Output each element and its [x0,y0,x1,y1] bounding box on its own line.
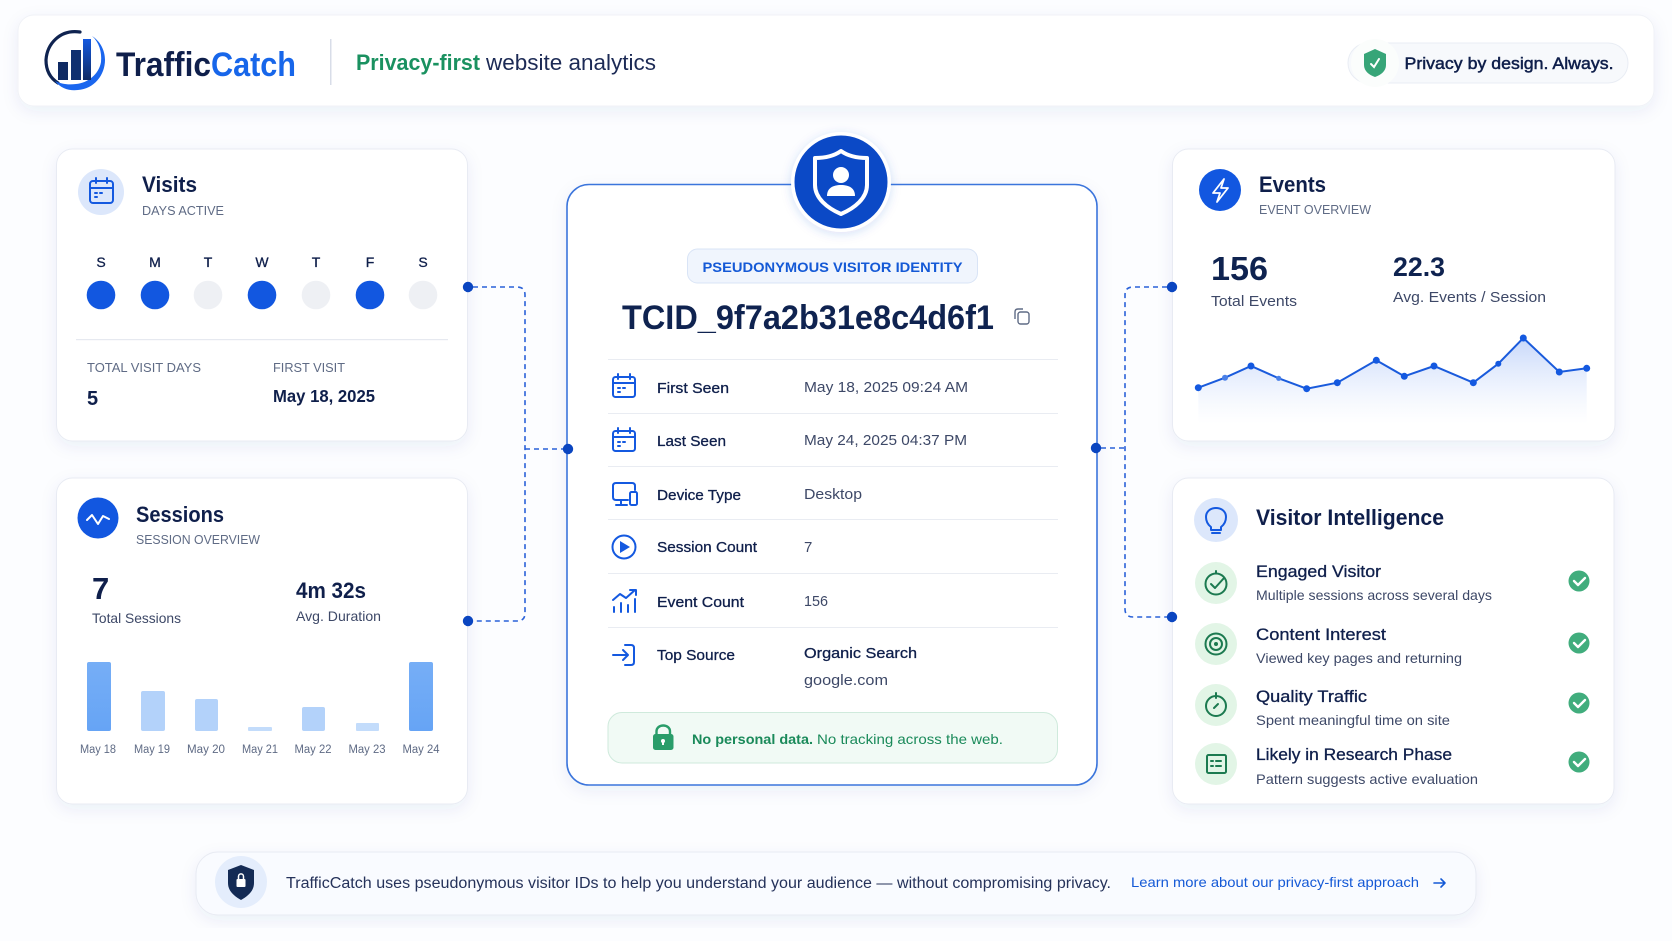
line chart: events [1195,334,1590,424]
sessions heading: Sessions [136,502,224,527]
row: top source: Top Source [657,647,735,664]
bar chart: sessions by day: May 18 [80,744,116,756]
days active row: W [255,254,269,270]
total sessions [92,571,181,626]
connector: left [463,282,573,626]
footer banner: TrafficCatch uses pseudonymous visitor IDs to help you understand your audience — without compromising privacy. [286,875,1111,892]
row: event count: 156 [804,593,828,610]
tagline [356,50,656,75]
row: first seen [613,374,968,397]
icon: arrow [1434,879,1445,887]
icon: first seen calendar [613,374,635,397]
panel: visits [56,149,468,441]
item: research phase: Pattern suggests active evaluation [1256,771,1478,787]
icon: check [1568,752,1590,772]
panel: sessions [56,478,468,804]
events heading [1259,172,1372,217]
row: event count [613,590,828,612]
row: first seen: May 18, 2025 09:24 AM [804,379,968,396]
average duration: 4m 32s [296,578,366,603]
bar chart: sessions by day: May 19 [134,744,170,756]
bar chart: sessions by day: May 21 [242,744,278,756]
bar chart: sessions by day: May 22 [294,744,332,756]
days active row: T [204,254,213,270]
visits heading: Visits [142,172,197,197]
panel: events [1172,149,1615,441]
total visit days: TOTAL VISIT DAYS [87,360,201,375]
events heading: EVENT OVERVIEW [1259,202,1372,217]
bar chart: sessions by day: May 20 [187,744,225,756]
privacy badge: Privacy by design. Always. [1404,54,1614,73]
privacy badge [1348,39,1628,87]
days active row: M [149,254,161,270]
item: content interest: Viewed key pages and returning [1256,650,1462,666]
row: last seen: May 24, 2025 04:37 PM [804,432,967,449]
total sessions: Total Sessions [92,610,181,626]
icon: visits calendar [78,169,124,215]
row: event count: Event Count [657,594,745,611]
logo wordmark: Catch [211,46,296,84]
icon: shield with person [791,132,891,232]
visitor intelligence heading: Visitor Intelligence [1256,505,1444,530]
privacy note: No personal data. [692,731,813,747]
first visit: FIRST VISIT [273,360,345,375]
tagline: website analytics [485,50,656,75]
total visit days [87,360,201,410]
row: device type: Desktop [804,486,862,503]
days active row [87,254,437,309]
icon: sessions pulse [78,498,118,538]
item: research phase: Likely in Research Phase [1256,746,1452,764]
footer banner [196,852,1476,915]
average duration [296,578,381,624]
item: quality traffic: Quality Traffic [1256,688,1367,706]
icon: green lock [653,726,674,750]
average events per session: 22.3 [1393,252,1445,282]
average events per session: Avg. Events / Session [1393,289,1546,306]
row: device type: Device Type [657,487,741,504]
item: quality traffic: Spent meaningful time on site [1256,712,1450,728]
icon: desktop and phone [613,483,637,505]
connector: right [1091,282,1177,622]
logo wordmark: Traffic [116,46,211,84]
visitor id: TCID_9f7a2b31e8c4d6f1 [622,299,994,337]
item: engaged visitor [1195,562,1590,604]
item: research phase [1195,743,1590,787]
panel: visitor intelligence [1172,478,1614,804]
icon: target [1195,623,1237,665]
row: first seen: First Seen [657,380,729,397]
item: quality traffic [1195,684,1590,728]
days active row: S [418,254,428,270]
icon: research card [1195,743,1237,785]
row: last seen: Last Seen [657,433,726,450]
tagline: Privacy-first [356,50,481,75]
row: session count: 7 [804,539,812,556]
header bar [18,15,1654,106]
first visit: May 18, 2025 [273,386,375,406]
icon: check [1568,570,1590,592]
identity pill [688,249,978,283]
icon: sign in arrow [613,645,634,665]
bar chart: sessions by day: May 23 [348,744,386,756]
first visit [273,360,375,406]
row: last seen [613,428,967,451]
total events: Total Events [1211,293,1297,310]
item: engaged visitor: Multiple sessions across several days [1256,587,1492,603]
total sessions: 7 [92,571,109,606]
row: session count: Session Count [657,539,758,556]
bar chart: sessions by day [80,662,440,756]
panel: visitor identity [567,132,1097,785]
logo wordmark [116,46,296,84]
icon: engaged timer check [1195,562,1237,604]
row: top source: Organic Search [804,645,917,662]
icon: lightning bolt [1199,169,1241,211]
icon: copy [1015,309,1029,324]
days active row: T [312,254,321,270]
row: top source [613,645,917,689]
sessions heading [136,502,261,547]
total events: 156 [1211,250,1268,287]
identity pill: PSEUDONYMOUS VISITOR IDENTITY [702,259,963,275]
icon: stopwatch [1195,684,1237,726]
visits heading [142,172,224,218]
visits heading: DAYS ACTIVE [142,203,224,218]
icon: rising chart [613,590,636,612]
icon: check [1568,632,1590,654]
total events [1211,250,1297,310]
days active row: F [366,254,374,270]
bar chart: sessions by day: May 24 [402,744,440,756]
events heading: Events [1259,172,1326,197]
icon: shield with lock [215,856,267,908]
item: content interest [1195,623,1590,666]
icon: play [612,536,636,558]
icon: light bulb [1194,498,1238,542]
sessions heading: SESSION OVERVIEW [136,532,261,547]
icon: check [1568,692,1590,714]
row: device type [613,483,862,505]
average duration: Avg. Duration [296,608,381,624]
footer banner: Learn more about our privacy-first approach [1131,874,1419,890]
row: session count [612,536,812,558]
total visit days: 5 [87,388,98,410]
privacy note: No tracking across the web. [817,731,1003,747]
privacy note [608,712,1058,763]
icon: last seen calendar [613,428,635,451]
item: engaged visitor: Engaged Visitor [1256,563,1382,581]
item: content interest: Content Interest [1256,626,1386,644]
average events per session [1393,252,1546,306]
days active row: S [96,254,106,270]
icon: TrafficCatch logo [46,32,105,90]
row: top source: google.com [804,672,888,689]
